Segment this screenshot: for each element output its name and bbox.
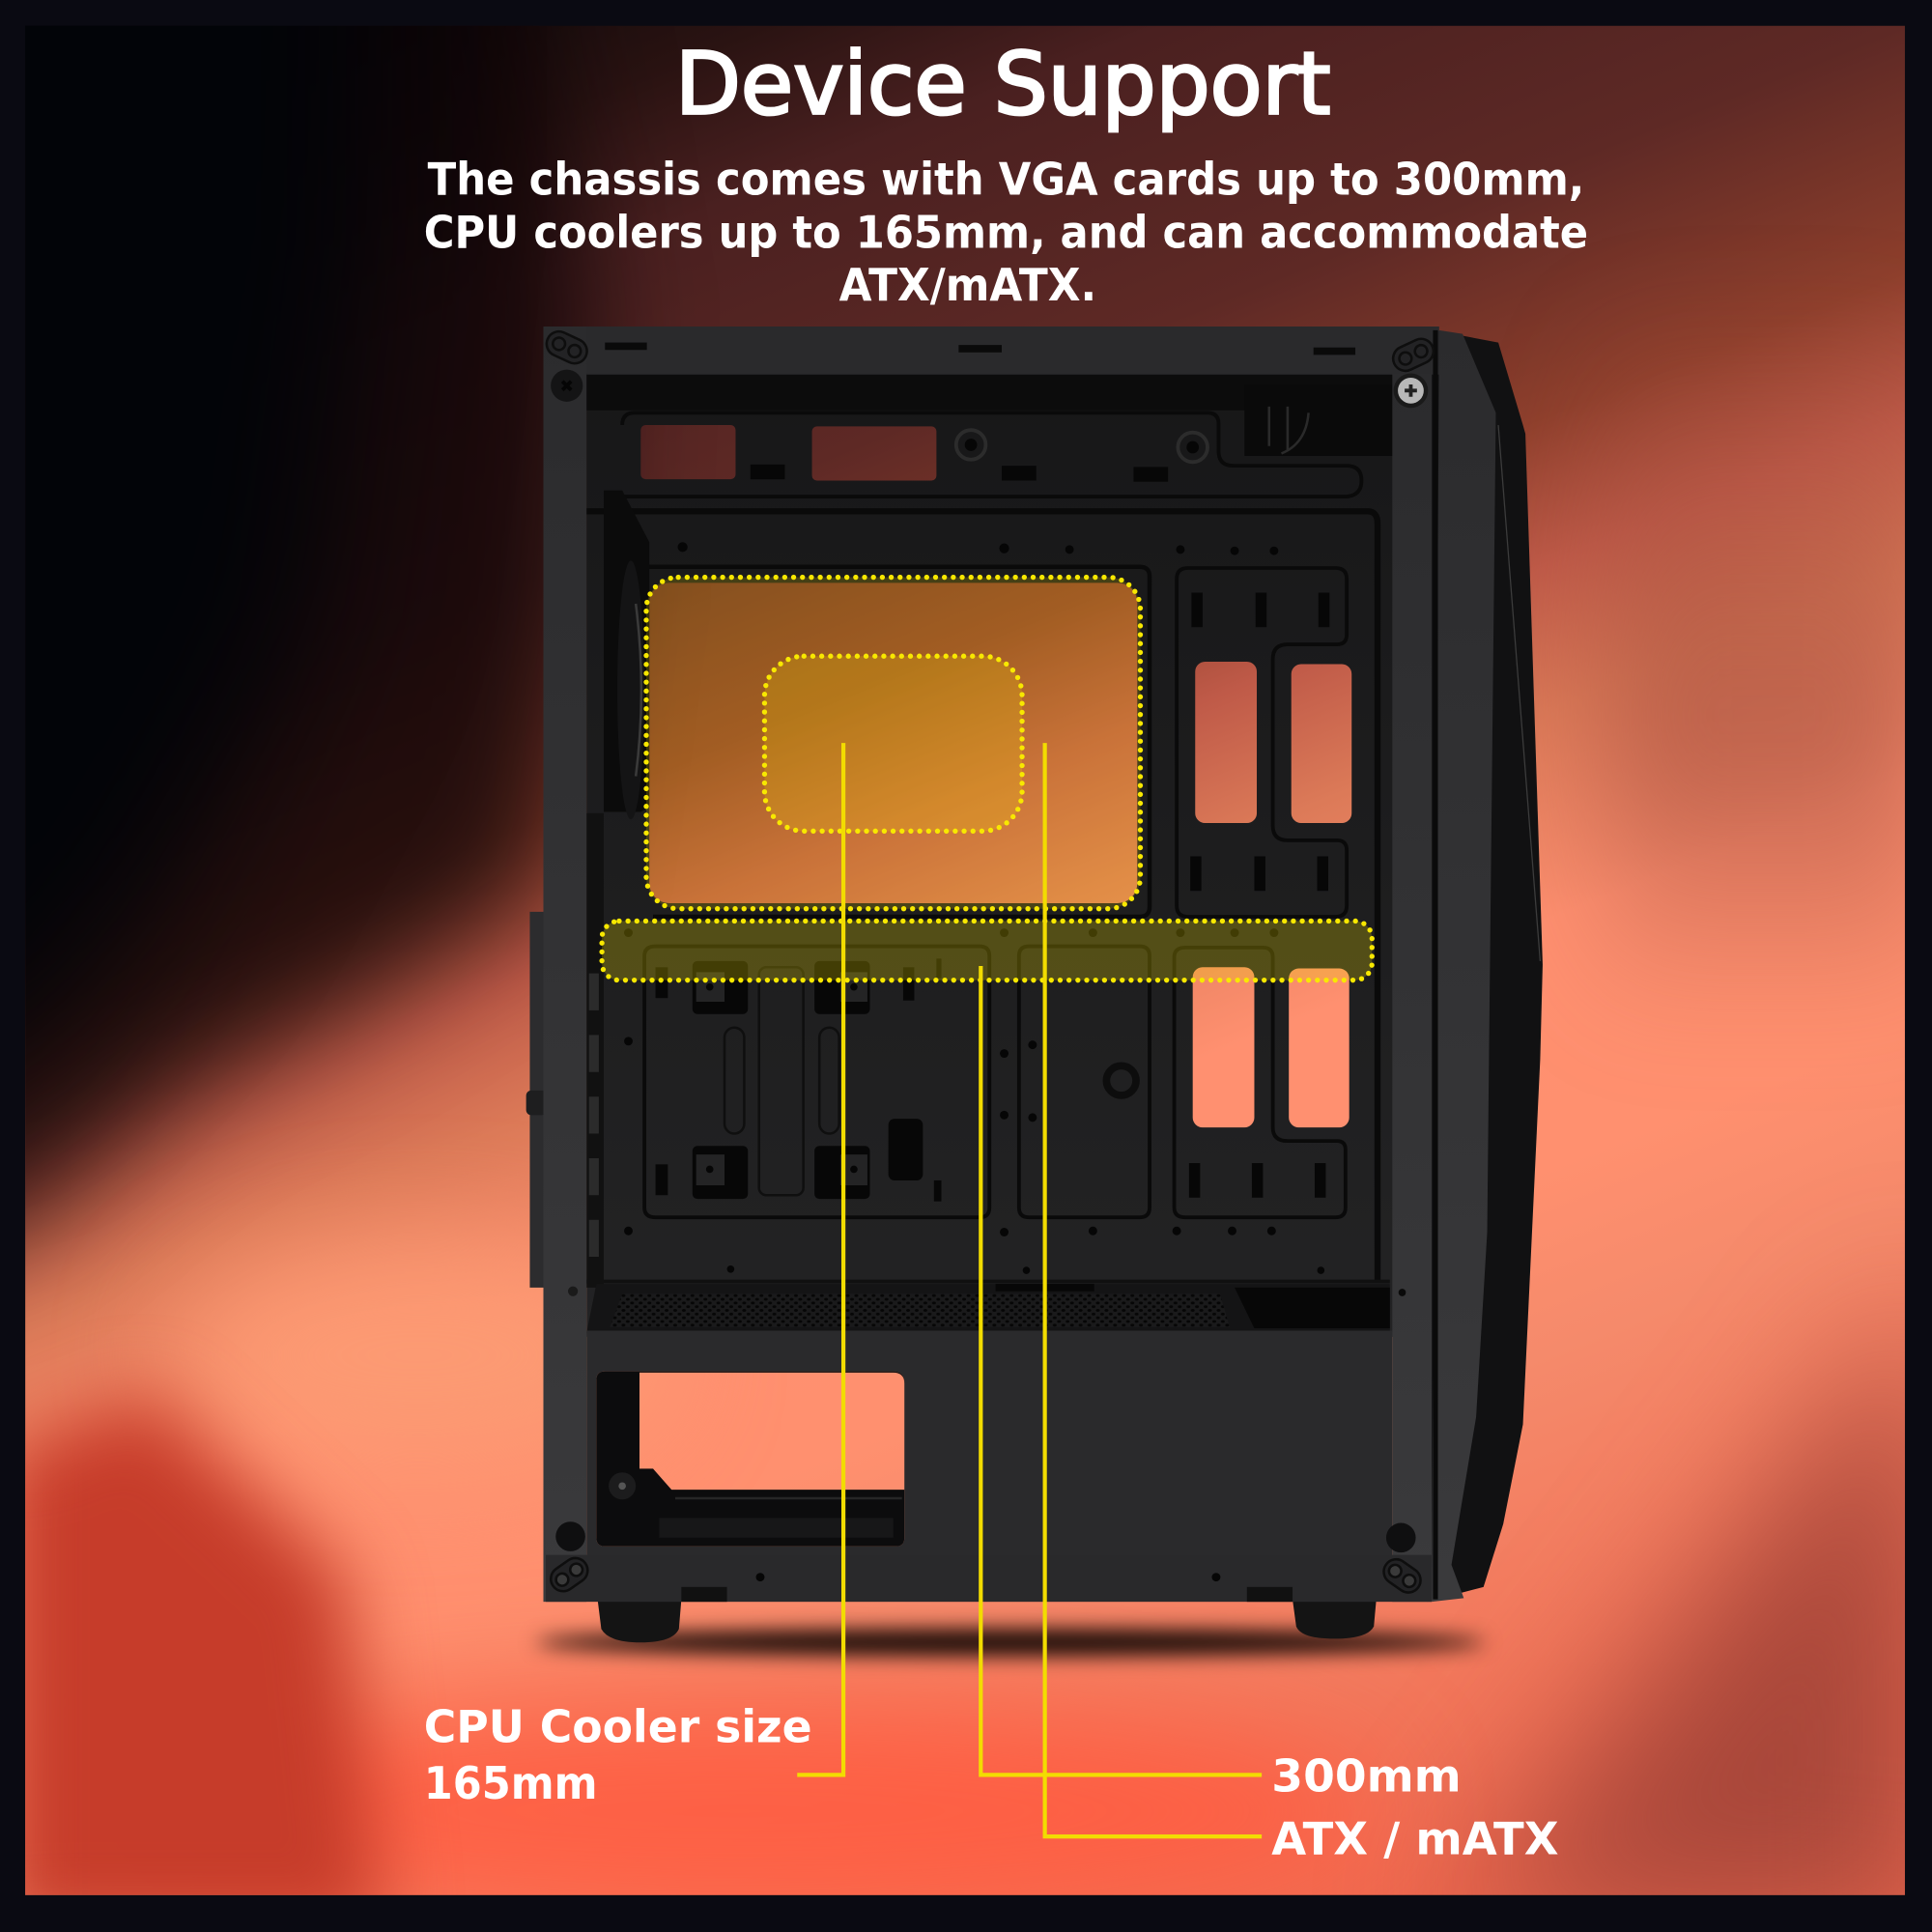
description text: ATX/mATX. bbox=[839, 259, 1096, 311]
bottom bar tabs and dots bbox=[568, 1287, 1406, 1602]
top bar bbox=[543, 327, 1439, 375]
label: ATX / mATX: ATX / mATX bbox=[1271, 1813, 1559, 1865]
rear comb bracket bbox=[586, 813, 604, 1288]
description text: CPU coolers up to 165mm, and can accommodate bbox=[424, 206, 1588, 258]
pillar gap line bbox=[1434, 330, 1437, 1600]
highlight: VGA length band bbox=[602, 921, 1372, 980]
floor shadow bbox=[536, 1629, 1485, 1656]
case feet bbox=[598, 1600, 1377, 1642]
mounting holes bbox=[624, 439, 1324, 1274]
right pillar bbox=[1392, 373, 1432, 1602]
label: 300mm: 300mm bbox=[1271, 1750, 1462, 1803]
chassis interior plate with cutouts bbox=[586, 370, 1399, 1337]
label: CPU cooler size: 165mm bbox=[424, 1757, 598, 1809]
top bar slots bbox=[605, 343, 1355, 355]
motherboard tray openings bbox=[656, 465, 1329, 1202]
connector line: ATX bbox=[1045, 743, 1262, 1836]
left side tab and knob bbox=[526, 912, 547, 1288]
description text: The chassis comes with VGA cards up to 300mm, bbox=[428, 154, 1584, 206]
highlight: CPU cooler area bbox=[764, 656, 1022, 831]
bottom bar bbox=[546, 1555, 1432, 1602]
highlight: motherboard ATX area bbox=[646, 578, 1140, 909]
shell highlight line bbox=[1498, 425, 1540, 961]
title: Device Support bbox=[675, 34, 1331, 134]
vent mesh section bbox=[586, 1284, 1390, 1333]
front side panel bbox=[1432, 330, 1495, 1602]
lower shroud with PSU opening bbox=[586, 1331, 1392, 1559]
label: CPU cooler size bbox=[424, 1701, 812, 1809]
connector line: CPU cooler bbox=[797, 743, 843, 1775]
corner brackets and screws bbox=[543, 327, 1437, 1598]
black front shell bbox=[1427, 329, 1543, 1602]
top dark recess and cables bbox=[586, 373, 1395, 456]
left pillar bbox=[543, 327, 586, 1602]
label: CPU cooler size: CPU Cooler size bbox=[424, 1701, 812, 1753]
stamped grooves on back plate bbox=[586, 412, 1390, 1282]
connector line: 300mm bbox=[980, 966, 1262, 1775]
computer case bbox=[526, 327, 1543, 1642]
PSU bay interior bbox=[596, 1372, 904, 1547]
standoff tabs in tray openings bbox=[696, 972, 867, 1185]
rear fan bbox=[604, 491, 649, 819]
raised standoffs bbox=[956, 430, 1208, 1095]
description text bbox=[424, 154, 1588, 311]
